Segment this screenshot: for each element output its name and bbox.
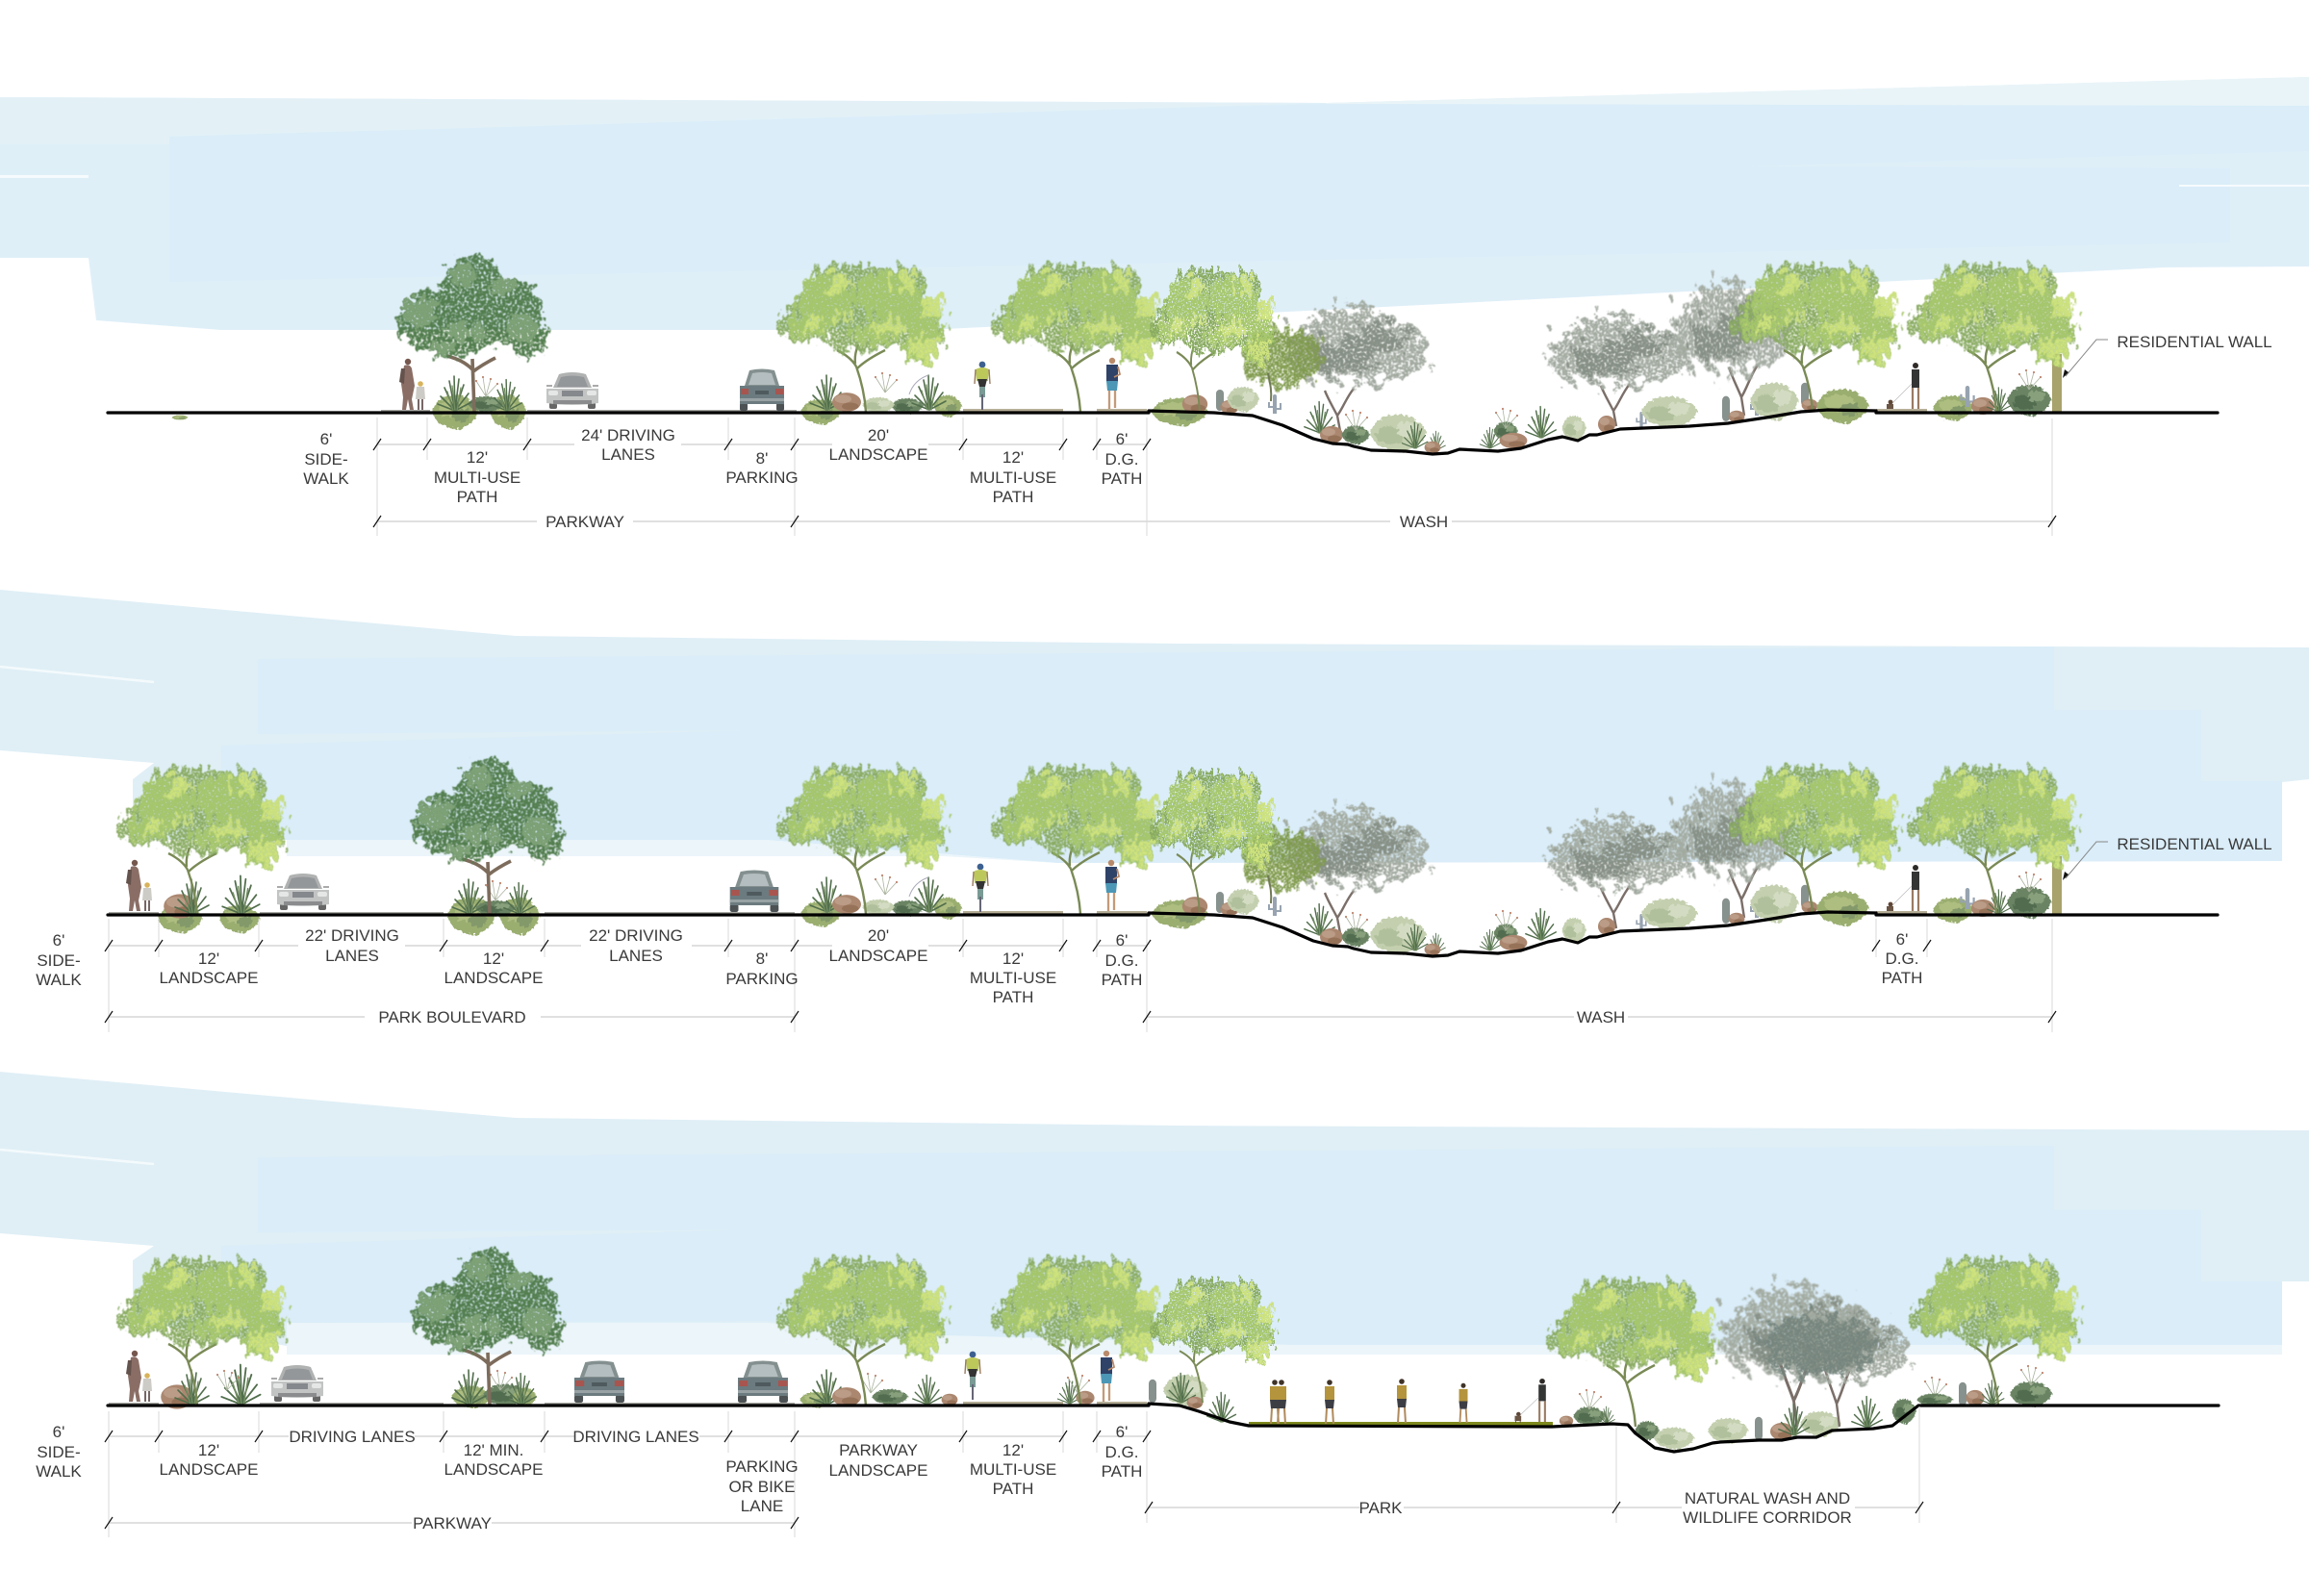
sky wash 1 <box>0 77 2309 330</box>
labels, section 3: PARK <box>1358 1499 1403 1517</box>
labels, section 2: PARKING <box>725 970 799 988</box>
labels, section 3: NATURAL WASH AND <box>1685 1489 1850 1507</box>
lawn, park people <box>1249 1379 1553 1427</box>
labels, section 3: LANDSCAPE <box>444 1460 543 1479</box>
panel: section 2 park boulevard and wash <box>0 590 2309 1032</box>
labels, section 3: 12' <box>198 1441 219 1459</box>
labels, section 2: MULTI-USE <box>970 969 1056 987</box>
labels, section 1: LANES <box>601 445 655 464</box>
labels, section 2: LANES <box>325 947 379 965</box>
labels, section 1: 20' <box>868 426 889 444</box>
labels, section 1: WALK <box>303 469 349 488</box>
labels, section 1: 12' <box>467 448 488 467</box>
people and cars, section 1 <box>399 358 1120 411</box>
labels, section 2: 8' <box>756 950 768 968</box>
labels, section 2: LANDSCAPE <box>160 969 258 987</box>
labels, section 1: PARKWAY <box>546 513 624 531</box>
labels, section 2: WASH <box>1577 1008 1625 1026</box>
labels, section 3: WILDLIFE CORRIDOR <box>1683 1508 1852 1527</box>
labels, section 2: 12' <box>198 950 219 968</box>
pavement strips, section 2 <box>109 911 1927 915</box>
road plantings and trees, section 1 <box>172 256 1159 429</box>
labels, section 2: LANDSCAPE <box>444 969 543 987</box>
pavement strips, section 1 <box>381 409 1927 413</box>
labels, section 1 <box>303 426 1448 531</box>
labels, section 3: PARKWAY <box>413 1514 492 1533</box>
labels, section 2: PATH <box>1882 969 1922 987</box>
labels, section 1: MULTI-USE <box>434 469 520 487</box>
sky wash 3 <box>0 1072 2309 1355</box>
callout: residential wall <box>2063 333 2272 378</box>
labels, section 2 <box>36 926 1922 1026</box>
labels, section 1: MULTI-USE <box>970 469 1056 487</box>
labels, section 2: LANDSCAPE <box>829 947 927 965</box>
pavement strips, section 3 <box>109 1402 1147 1406</box>
labels, section 3: PATH <box>993 1480 1033 1498</box>
labels, section 3: DRIVING LANES <box>572 1428 699 1446</box>
labels, section 3: LANE <box>741 1497 783 1515</box>
labels, section 3 <box>36 1423 1852 1533</box>
ground line with wash profile, section 1 <box>108 410 2218 454</box>
labels, section 3: 6' <box>53 1423 64 1441</box>
park plants and trees, section 3 <box>1149 1259 2077 1449</box>
labels, section 2: 20' <box>868 926 889 945</box>
labels, section 1: WASH <box>1400 513 1448 531</box>
road plantings and trees, section 3 <box>117 1250 1159 1409</box>
labels, section 1: LANDSCAPE <box>829 445 927 464</box>
labels, section 3: MULTI-USE <box>970 1460 1056 1479</box>
labels, section 3: PARKING <box>725 1457 799 1476</box>
sky wash 2 <box>0 590 2309 863</box>
labels, section 2: 6' <box>1896 930 1908 949</box>
labels, section 2: PARK BOULEVARD <box>378 1008 526 1026</box>
labels, section 1: PATH <box>993 488 1033 506</box>
labels, section 1: 24' DRIVING <box>581 426 675 444</box>
labels, section 1: PATH <box>457 488 497 506</box>
labels, section 2: 12' <box>483 950 504 968</box>
labels, section 3: LANDSCAPE <box>829 1461 927 1480</box>
labels, section 3: SIDE- <box>37 1443 81 1461</box>
labels, section 3: PATH <box>1102 1462 1142 1481</box>
callout: residential wall: RESIDENTIAL WALL <box>2117 333 2272 351</box>
dimension lines, section 3 <box>105 1406 1923 1537</box>
labels, section 2: SIDE- <box>37 951 81 970</box>
labels, section 3: 12' MIN. <box>464 1441 523 1459</box>
callout: residential wall: RESIDENTIAL WALL <box>2117 835 2272 853</box>
labels, section 2: 6' <box>53 931 64 950</box>
people and cars, section 3 <box>126 1351 1114 1403</box>
labels, section 2: D.G. <box>1886 950 1918 968</box>
labels, section 2: PATH <box>1102 971 1142 989</box>
labels, section 1: D.G. <box>1105 450 1138 469</box>
labels, section 1: 6' <box>320 430 332 448</box>
labels, section 2: 22' DRIVING <box>589 926 683 945</box>
labels, section 3: WALK <box>36 1462 82 1481</box>
labels, section 2: LANES <box>609 947 663 965</box>
panel: section 3 parkway, park and natural wash <box>0 1072 2309 1537</box>
labels, section 2: 12' <box>1002 950 1024 968</box>
labels, section 1: 8' <box>756 449 768 468</box>
labels, section 2: D.G. <box>1105 951 1138 970</box>
labels, section 3: 6' <box>1116 1423 1128 1441</box>
callout: residential wall <box>2063 835 2272 880</box>
labels, section 2: 22' DRIVING <box>305 926 399 945</box>
labels, section 1: PARKING <box>725 469 799 487</box>
dimension lines, section 1 <box>373 418 2056 536</box>
people and cars, section 2 <box>126 860 1119 912</box>
labels, section 1: SIDE- <box>304 450 348 469</box>
ground line with wash profile, section 2 <box>108 912 2218 956</box>
wash trees and plants, section 2 <box>1151 768 2075 955</box>
labels, section 3: LANDSCAPE <box>160 1460 258 1479</box>
labels, section 1: 6' <box>1116 430 1128 448</box>
labels, section 3: PARKWAY <box>839 1441 918 1459</box>
labels, section 1: PATH <box>1102 469 1142 488</box>
labels, section 2: WALK <box>36 971 82 989</box>
labels, section 2: 6' <box>1116 931 1128 950</box>
road plantings and trees, section 2 <box>117 759 1159 934</box>
labels, section 3: 12' <box>1002 1441 1024 1459</box>
wash trees and plants, section 1 <box>1151 266 2075 453</box>
labels, section 3: DRIVING LANES <box>289 1428 416 1446</box>
labels, section 3: D.G. <box>1105 1443 1138 1461</box>
labels, section 1: 12' <box>1002 448 1024 467</box>
labels, section 3: OR BIKE <box>729 1478 795 1496</box>
panel: section 1 parkway and wash <box>0 77 2309 536</box>
ground line with park and wash profile, section 3 <box>108 1404 2219 1452</box>
labels, section 2: PATH <box>993 988 1033 1006</box>
dimension lines, section 2 <box>105 919 2056 1032</box>
